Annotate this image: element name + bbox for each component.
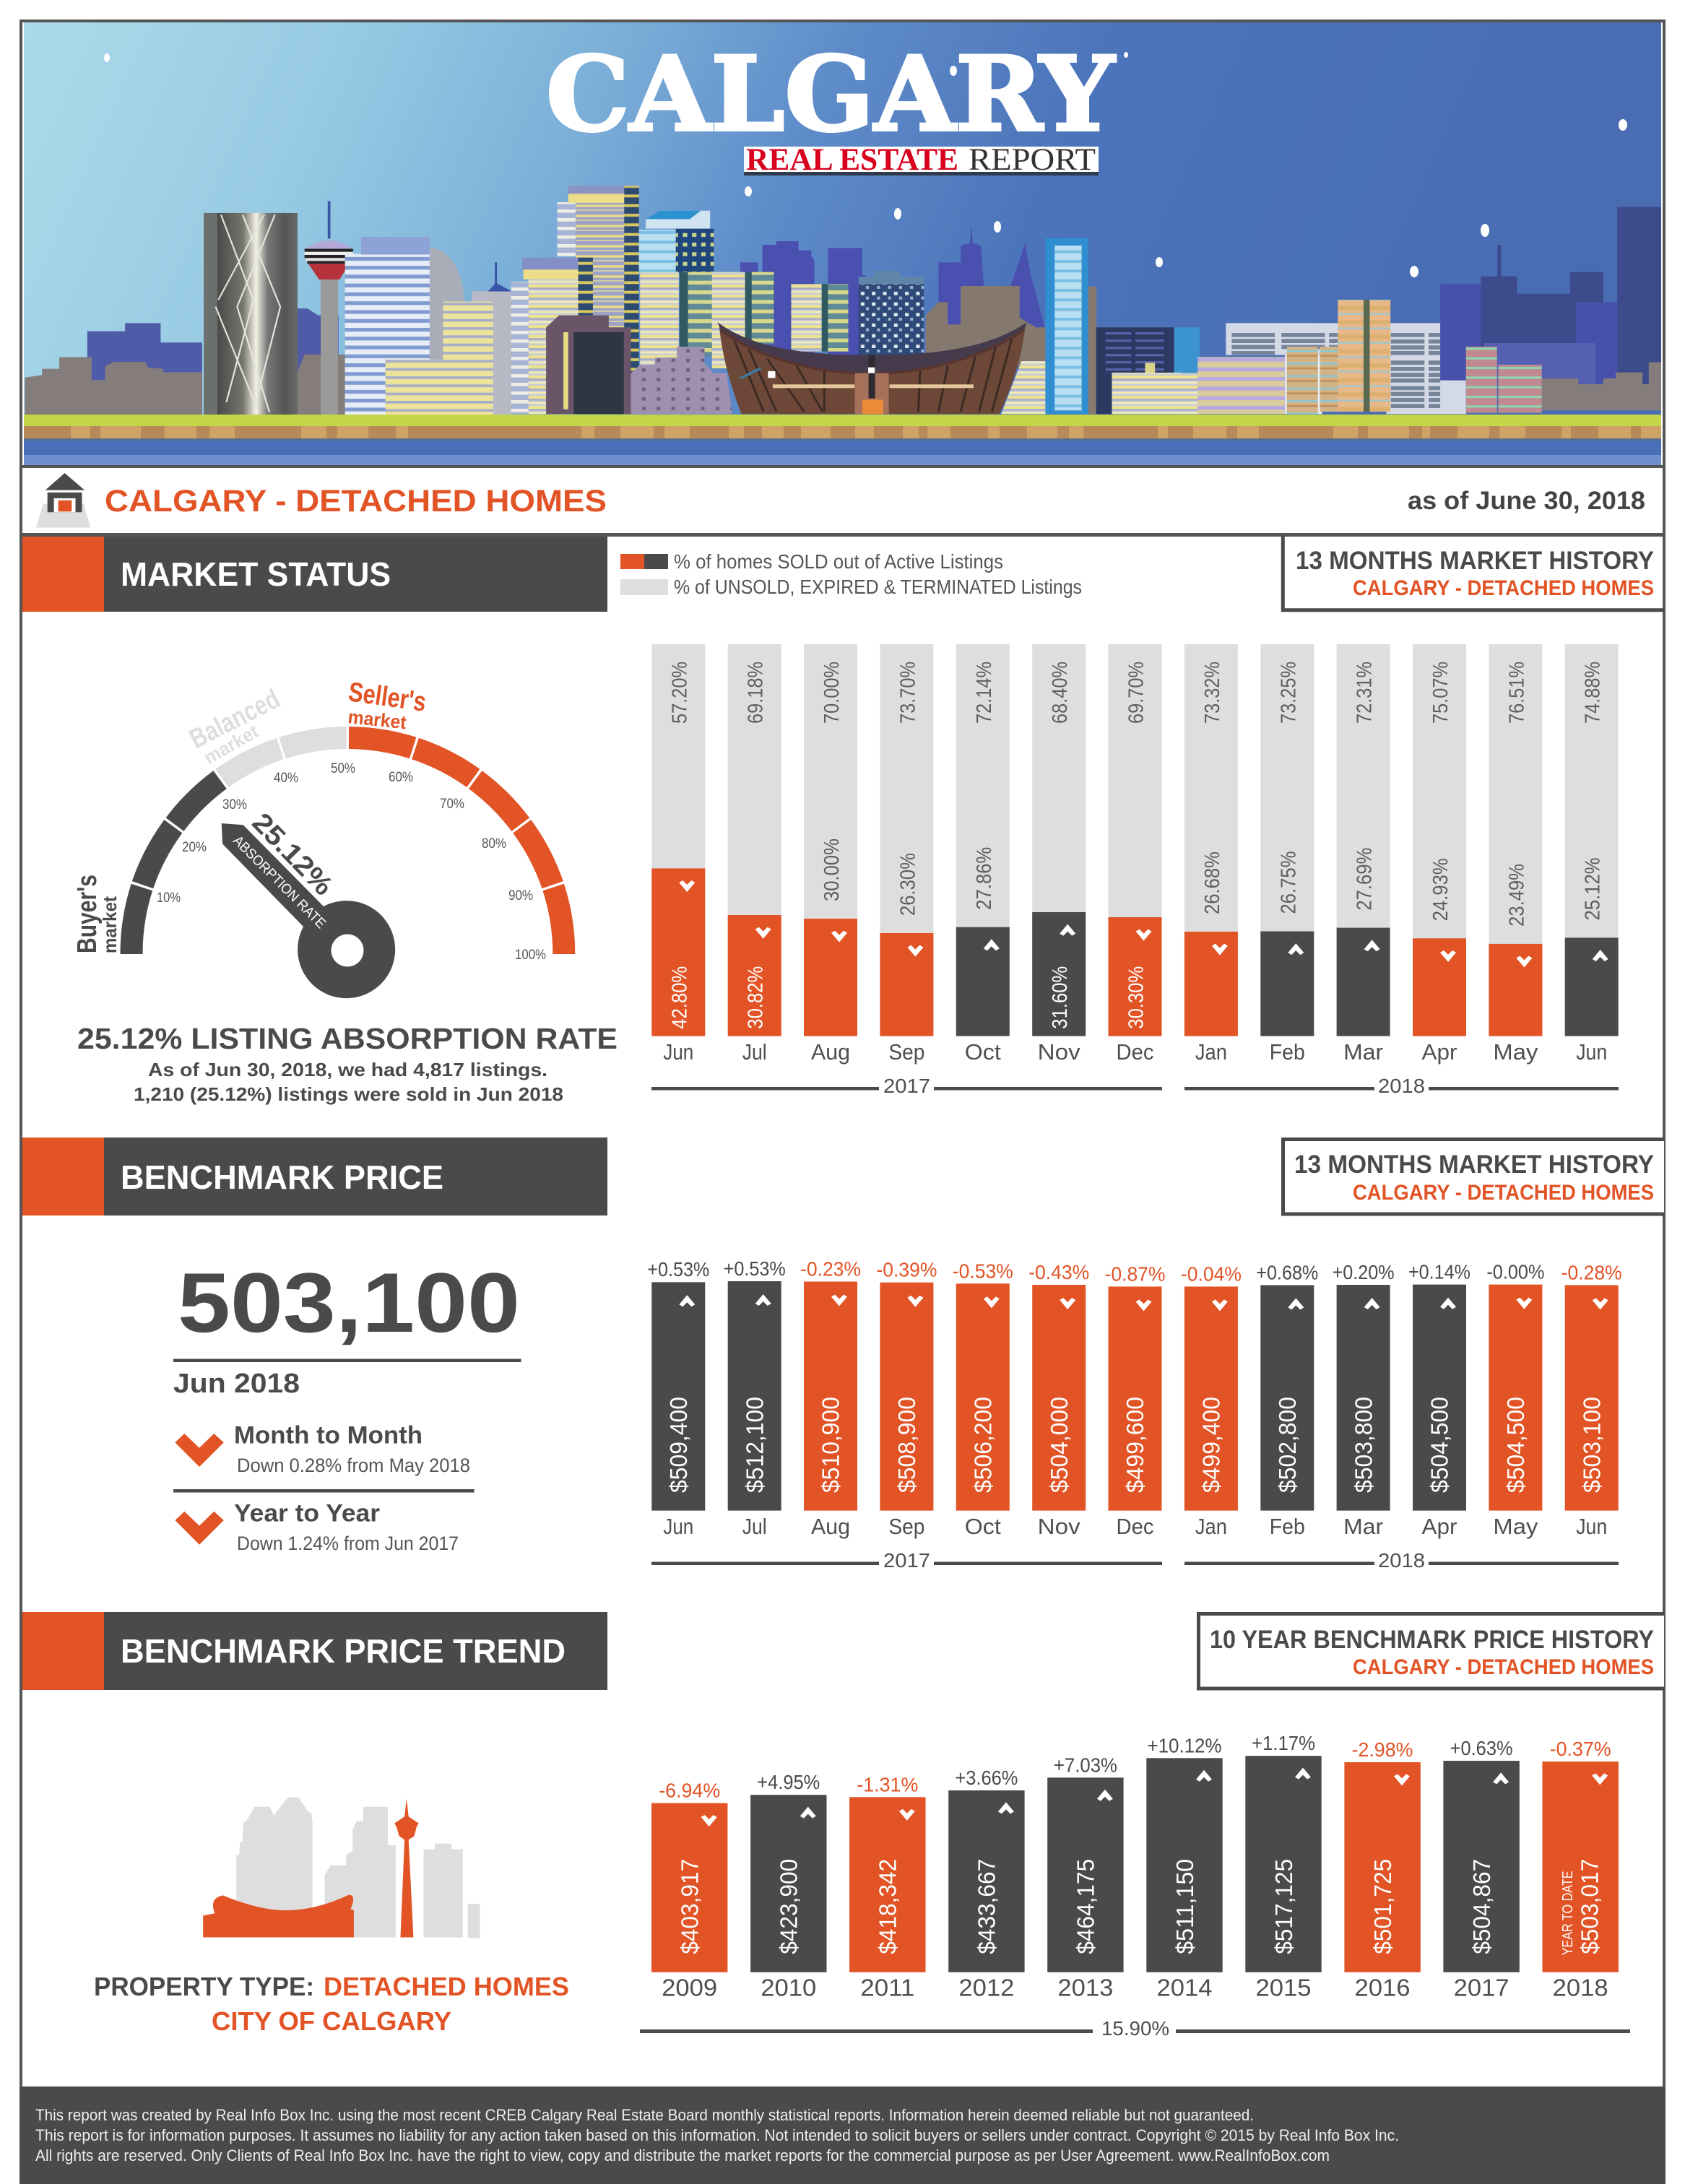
Jan 2018 — [1181, 1262, 1242, 1539]
Feb 2018: $502,800 — [1274, 1397, 1301, 1493]
Jan 2018: Jan — [1195, 1514, 1227, 1539]
2018: YEAR TO DATE — [1560, 1871, 1576, 1955]
Mar 2018 — [1337, 644, 1390, 1065]
Jul 2017: Jul — [742, 1039, 767, 1065]
Jul 2017: $512,100 — [741, 1397, 768, 1493]
divider — [173, 1359, 521, 1362]
Apr 2018 — [1408, 1261, 1470, 1539]
Jan 2018: $499,400 — [1198, 1397, 1225, 1493]
legend: % of homes SOLD out of Active Listings — [674, 550, 1003, 573]
legend — [620, 550, 1082, 598]
2015 — [1245, 1732, 1322, 2001]
2017: 2017 — [1454, 1975, 1509, 2001]
Aug 2017 — [804, 644, 857, 1065]
2010: $423,900 — [776, 1859, 802, 1954]
May 2018 — [1489, 644, 1542, 1065]
year to year change: Year to Year — [234, 1499, 380, 1527]
Sep 2017 — [880, 644, 933, 1065]
Dec 2017: $499,600 — [1122, 1397, 1148, 1493]
Oct 2017: 27.86% — [973, 847, 996, 910]
Sep 2017: 73.70% — [896, 662, 919, 724]
gauge percentage ticks: 30% — [222, 797, 247, 812]
Feb 2018 — [1256, 1261, 1318, 1539]
2015: $517,125 — [1270, 1859, 1297, 1954]
section header: benchmark price trend — [22, 1612, 607, 1690]
absorption rate details: As of Jun 30, 2018, we had 4,817 listings. — [148, 1059, 547, 1080]
2012 — [948, 1767, 1025, 2001]
Mar 2018: 27.69% — [1353, 848, 1377, 911]
Nov 2017: 31.60% — [1049, 966, 1072, 1029]
Sep 2017: -0.39% — [876, 1259, 937, 1281]
2018: -0.37% — [1550, 1738, 1611, 1760]
gauge percentage ticks: 60% — [389, 770, 413, 785]
Oct 2017: Oct — [965, 1039, 1001, 1065]
section header: benchmark price trend: BENCHMARK PRICE TREND — [121, 1632, 566, 1670]
Apr 2018: +0.14% — [1408, 1261, 1470, 1283]
2015: 2015 — [1255, 1975, 1312, 2001]
title box: 13 months market history: 13 MONTHS MARKET HISTORY — [1296, 547, 1654, 575]
icon: house — [36, 473, 90, 528]
Jul 2017: 69.18% — [745, 662, 768, 724]
2009 — [651, 1780, 727, 2001]
2018: $503,017 — [1577, 1859, 1603, 1954]
year axis — [651, 1075, 1619, 1097]
year axis: 2018 — [1378, 1075, 1425, 1097]
Oct 2017: Oct — [965, 1514, 1001, 1539]
Aug 2017: 70.00% — [820, 662, 844, 724]
2018 — [1543, 1738, 1619, 2001]
Jun 2017 — [647, 1258, 709, 1539]
2009: 2009 — [662, 1975, 717, 2001]
gauge: absorption rate: Balanced — [185, 684, 285, 755]
Dec 2017: Dec — [1117, 1514, 1154, 1539]
Oct 2017: 72.14% — [973, 662, 996, 724]
title box: 10 year benchmark price history: 10 YEAR BENCHMARK PRICE HISTORY — [1210, 1626, 1654, 1654]
2014: 2014 — [1157, 1975, 1212, 2001]
2016 — [1344, 1738, 1421, 2001]
Dec 2017: Dec — [1117, 1039, 1154, 1065]
absorption rate details — [134, 1059, 563, 1105]
Jun 2018: $503,100 — [1578, 1397, 1605, 1493]
gauge: absorption rate: 25.12% — [246, 807, 339, 901]
Mar 2018 — [1333, 1261, 1395, 1539]
Aug 2017: $510,900 — [818, 1397, 844, 1493]
May 2018: 23.49% — [1505, 864, 1528, 927]
month to month change: Month to Month — [234, 1421, 423, 1449]
footer disclaimer — [20, 2086, 1665, 2184]
Sep 2017 — [876, 1259, 937, 1539]
May 2018: $504,500 — [1502, 1397, 1529, 1493]
chart: 13 month absorption stacked bars — [651, 644, 1619, 1097]
Apr 2018: 24.93% — [1429, 858, 1452, 921]
Jan 2018: -0.04% — [1181, 1262, 1242, 1285]
gauge percentage ticks: 20% — [182, 840, 207, 855]
benchmark date: Jun 2018 — [173, 1369, 300, 1399]
subtitle: real estate report: REPORT — [969, 143, 1096, 177]
Apr 2018: Apr — [1421, 1514, 1457, 1539]
May 2018: May — [1493, 1514, 1538, 1539]
section header: market status — [22, 537, 607, 612]
Jul 2017 — [728, 644, 781, 1065]
gauge percentage ticks — [157, 761, 546, 963]
banner: Calgary skyline illustration — [24, 22, 1661, 465]
Sep 2017: Sep — [888, 1039, 924, 1065]
year axis: 2017 — [883, 1075, 930, 1097]
title box: 10 year benchmark price history — [1199, 1613, 1664, 1689]
2012: $433,667 — [974, 1859, 1000, 1954]
Jun 2017: 42.80% — [668, 966, 691, 1029]
gauge: absorption rate: Seller's — [347, 677, 428, 718]
Mar 2018: +0.20% — [1333, 1261, 1395, 1283]
2012: +3.66% — [955, 1767, 1018, 1789]
Sep 2017: 26.30% — [896, 853, 919, 916]
property type caption: CITY OF CALGARY — [212, 2006, 451, 2036]
absorption rate headline: 25.12% LISTING ABSORPTION RATE — [77, 1022, 618, 1055]
gauge arcs — [131, 738, 564, 954]
gauge percentage ticks: 80% — [482, 836, 506, 852]
gauge needle — [222, 823, 395, 998]
gauge: absorption rate — [72, 677, 564, 998]
date: as of June 30, 2018 — [1408, 487, 1645, 515]
Jun 2017: $509,400 — [665, 1397, 692, 1493]
Jan 2018: Jan — [1195, 1039, 1227, 1065]
2011: -1.31% — [857, 1773, 918, 1795]
Nov 2017: -0.43% — [1028, 1261, 1089, 1283]
footer disclaimer: This report was created by Real Info Box Inc. using the most recent CREB Calgary Real Estate Board monthly statistical reports. Information herein deemed reliable but not guaranteed. — [35, 2106, 1254, 2124]
2013: 2013 — [1057, 1975, 1113, 2001]
gauge percentage ticks: 100% — [515, 948, 546, 963]
Mar 2018: 72.31% — [1353, 662, 1377, 724]
skyline left part — [25, 201, 512, 415]
month to month change — [175, 1421, 470, 1476]
title box: 13 months market history: 13 MONTHS MARKET HISTORY — [1294, 1150, 1654, 1179]
Jul 2017: +0.53% — [724, 1257, 786, 1280]
year axis — [651, 1549, 1619, 1572]
footer disclaimer: All rights are reserved. Only Clients of Real Info Box Inc. have the right to view, copy and distribute the market reports for the commercial purpose as per User Agreement. www.RealInfoBox.com — [35, 2146, 1330, 2164]
heading: Calgary detached homes: CALGARY - DETACHED HOMES — [105, 484, 607, 519]
2014: +10.12% — [1147, 1734, 1222, 1756]
year to year change: Down 1.24% from Jun 2017 — [237, 1533, 459, 1554]
icon: Calgary skyline silhouette — [203, 1798, 480, 1938]
big number: benchmark price: 503,100 — [178, 1255, 520, 1350]
Mar 2018: $503,800 — [1350, 1397, 1377, 1493]
Jun 2018: 74.88% — [1582, 662, 1605, 724]
2010 — [750, 1771, 826, 2001]
ground and water — [24, 415, 1661, 465]
Jun 2017: +0.53% — [647, 1258, 709, 1280]
property type caption: DETACHED HOMES — [324, 1972, 569, 2001]
section header: benchmark price: BENCHMARK PRICE — [121, 1158, 443, 1196]
Aug 2017: Aug — [811, 1039, 850, 1065]
divider — [173, 1489, 475, 1492]
gauge: absorption rate: market — [99, 896, 121, 953]
Mar 2018: Mar — [1343, 1039, 1383, 1065]
Sep 2017: Sep — [888, 1514, 924, 1539]
Jun 2018: 25.12% — [1582, 857, 1605, 920]
May 2018 — [1486, 1261, 1544, 1539]
Dec 2017: 30.30% — [1125, 966, 1148, 1029]
month to month change: Down 0.28% from May 2018 — [237, 1455, 470, 1476]
Jun 2018 — [1565, 644, 1619, 1065]
Aug 2017: 30.00% — [820, 838, 844, 901]
Feb 2018: 26.75% — [1277, 851, 1300, 914]
title box: 10 year benchmark price history: CALGARY - DETACHED HOMES — [1353, 1655, 1654, 1679]
Apr 2018 — [1413, 644, 1466, 1065]
Nov 2017 — [1028, 1261, 1089, 1539]
Feb 2018: Feb — [1270, 1514, 1305, 1539]
section header: market status: MARKET STATUS — [121, 555, 391, 593]
section header: benchmark price — [22, 1138, 607, 1216]
Feb 2018: 73.25% — [1277, 662, 1300, 724]
gauge: absorption rate: market — [347, 706, 407, 733]
gauge percentage ticks: 70% — [440, 797, 464, 812]
Oct 2017: $506,200 — [969, 1397, 997, 1493]
Mar 2018: Mar — [1343, 1514, 1383, 1539]
2009: -6.94% — [659, 1780, 720, 1802]
Jun 2017: 57.20% — [668, 662, 691, 724]
2014 — [1146, 1734, 1223, 2001]
Dec 2017: 69.70% — [1125, 662, 1148, 724]
2018: 2018 — [1553, 1975, 1608, 2001]
Aug 2017 — [800, 1258, 861, 1539]
Feb 2018: +0.68% — [1256, 1261, 1318, 1283]
gauge: absorption rate: ABSORPTION RATE — [230, 833, 329, 932]
Jun 2018: Jun — [1576, 1039, 1607, 1065]
subtitle: real estate report — [744, 143, 1099, 177]
subtitle: real estate report: REAL ESTATE — [746, 143, 958, 177]
year axis: 2017 — [883, 1549, 930, 1572]
2013: +7.03% — [1054, 1754, 1117, 1776]
Nov 2017: Nov — [1038, 1514, 1080, 1539]
Feb 2018 — [1260, 644, 1314, 1065]
gauge: absorption rate: market — [200, 720, 262, 768]
gauge percentage ticks: 50% — [331, 761, 355, 776]
May 2018: 76.51% — [1505, 662, 1528, 724]
property type caption: PROPERTY TYPE: — [94, 1972, 314, 2001]
footer disclaimer: This report is for information purposes. It assumes no liability for any action taken based on this information. Not intended to solicit buyers or sellers under contract. Copyright © 2015 by Real Info Box Inc. — [35, 2126, 1399, 2144]
title box: 13 months market history: CALGARY - DETACHED HOMES — [1353, 576, 1654, 600]
Jan 2018: 26.68% — [1201, 852, 1224, 914]
title box: 13 months market history — [1283, 1140, 1664, 1214]
property type caption — [94, 1972, 569, 2036]
2016: $501,725 — [1369, 1859, 1396, 1954]
title box: 13 months market history — [1283, 535, 1664, 610]
Dec 2017: -0.87% — [1105, 1262, 1166, 1285]
skyline centre with Saddledome — [511, 186, 1045, 414]
2009: $403,917 — [676, 1859, 703, 1954]
year to year change — [175, 1499, 459, 1554]
skyline right part — [1046, 207, 1661, 414]
stars — [104, 52, 1627, 277]
Apr 2018: $504,500 — [1426, 1397, 1453, 1493]
Apr 2018: 75.07% — [1429, 662, 1452, 724]
May 2018: -0.00% — [1486, 1261, 1544, 1283]
Oct 2017 — [956, 644, 1010, 1065]
Jul 2017: 30.82% — [745, 966, 768, 1029]
2017 — [1443, 1737, 1520, 2001]
Jun 2018: Jun — [1576, 1514, 1607, 1539]
Saddledome arena — [717, 322, 1027, 414]
Dec 2017 — [1108, 644, 1161, 1065]
2015: +1.17% — [1252, 1732, 1315, 1754]
2012: 2012 — [958, 1975, 1014, 2001]
Jan 2018 — [1184, 644, 1238, 1065]
2011 — [849, 1773, 926, 2001]
overall change axis — [640, 2017, 1630, 2040]
gauge percentage ticks: 90% — [508, 888, 533, 904]
2013: $464,175 — [1073, 1859, 1099, 1954]
Nov 2017: Nov — [1038, 1039, 1080, 1065]
2010: +4.95% — [757, 1771, 820, 1793]
Nov 2017: $504,000 — [1046, 1397, 1073, 1493]
May 2018: May — [1493, 1039, 1538, 1065]
title box: 13 months market history: CALGARY - DETACHED HOMES — [1353, 1181, 1654, 1205]
Oct 2017: -0.53% — [953, 1260, 1013, 1282]
overall change axis: 15.90% — [1101, 2017, 1169, 2040]
Jul 2017 — [724, 1257, 786, 1539]
Jun 2017: Jun — [663, 1514, 693, 1539]
Feb 2018: Feb — [1270, 1039, 1305, 1065]
Jun 2017: Jun — [663, 1039, 693, 1065]
chart: 13 month benchmark price bars — [647, 1257, 1622, 1572]
Jun 2017 — [651, 644, 705, 1065]
Nov 2017 — [1032, 644, 1086, 1065]
2011: 2011 — [860, 1975, 914, 2001]
Aug 2017: -0.23% — [800, 1258, 861, 1280]
2013 — [1047, 1754, 1124, 2001]
Nov 2017: 68.40% — [1049, 662, 1072, 724]
2016: -2.98% — [1352, 1738, 1413, 1761]
title: CALGARY: CALGARY — [546, 35, 1116, 155]
Jul 2017: Jul — [742, 1514, 767, 1539]
Jun 2018 — [1561, 1261, 1622, 1539]
2017: +0.63% — [1450, 1737, 1513, 1759]
2014: $511,150 — [1171, 1859, 1198, 1954]
Jan 2018: 73.32% — [1201, 662, 1224, 724]
Aug 2017: Aug — [811, 1514, 850, 1539]
market zone labels: Buyer's — [72, 875, 103, 953]
2017: $504,867 — [1468, 1859, 1495, 1954]
year axis: 2018 — [1378, 1549, 1425, 1572]
2011: $418,342 — [875, 1859, 901, 1954]
gauge percentage ticks: 10% — [157, 890, 181, 906]
Dec 2017 — [1105, 1262, 1166, 1539]
2016: 2016 — [1355, 1975, 1410, 2001]
absorption rate details: 1,210 (25.12%) listings were sold in Jun 2018 — [134, 1083, 563, 1105]
Jun 2018: -0.28% — [1561, 1261, 1622, 1283]
Oct 2017 — [953, 1260, 1013, 1539]
gauge percentage ticks: 40% — [274, 771, 298, 786]
Sep 2017: $508,900 — [893, 1397, 920, 1493]
legend: % of UNSOLD, EXPIRED & TERMINATED Listings — [674, 576, 1082, 598]
chart: 10 year benchmark price bars — [640, 1732, 1630, 2040]
Apr 2018: Apr — [1421, 1039, 1457, 1065]
2010: 2010 — [761, 1975, 816, 2001]
